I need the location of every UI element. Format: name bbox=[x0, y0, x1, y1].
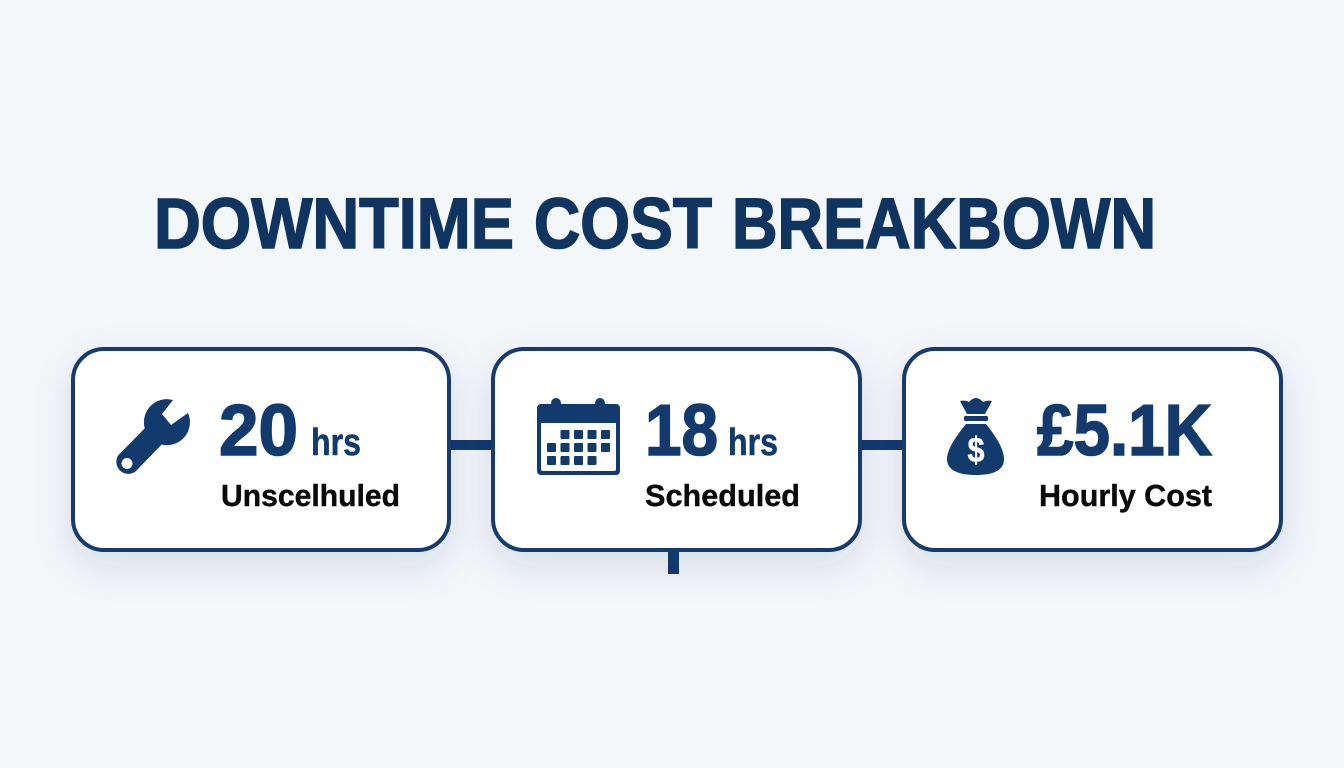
value: 18 hrs bbox=[645, 391, 778, 471]
title: DOWNTIME bbox=[154, 185, 514, 264]
connector: stem below card 2 bbox=[668, 550, 679, 574]
panel: hourly cost bbox=[904, 349, 1281, 550]
icon: money bag: $ bbox=[968, 431, 984, 470]
value: 18 hrs: hrs bbox=[728, 422, 778, 464]
label: Hourly Cost: Hourly Cost bbox=[1039, 478, 1212, 513]
value: 20 hrs: 20 bbox=[219, 391, 298, 471]
value: 20 hrs bbox=[219, 391, 361, 471]
icon: wrench bbox=[116, 399, 190, 474]
panel: scheduled downtime bbox=[493, 349, 860, 550]
icon: calendar bbox=[537, 398, 620, 475]
connector: card 2 to card 3 bbox=[860, 440, 904, 450]
value: £5.1K: £5.1K bbox=[1037, 391, 1212, 471]
title: COST bbox=[534, 185, 712, 264]
connector: card 1 to card 2 bbox=[449, 440, 493, 450]
label: Scheduled: Scheduled bbox=[645, 478, 800, 513]
panel: unscheduled downtime bbox=[73, 349, 449, 550]
value: 18 hrs: 18 bbox=[645, 391, 718, 471]
icon: money bag bbox=[947, 398, 1004, 475]
value: 20 hrs: hrs bbox=[311, 422, 361, 464]
label: Unscelhuled: Unscelhuled bbox=[221, 478, 400, 513]
title: BREAKBOWN bbox=[732, 185, 1156, 264]
